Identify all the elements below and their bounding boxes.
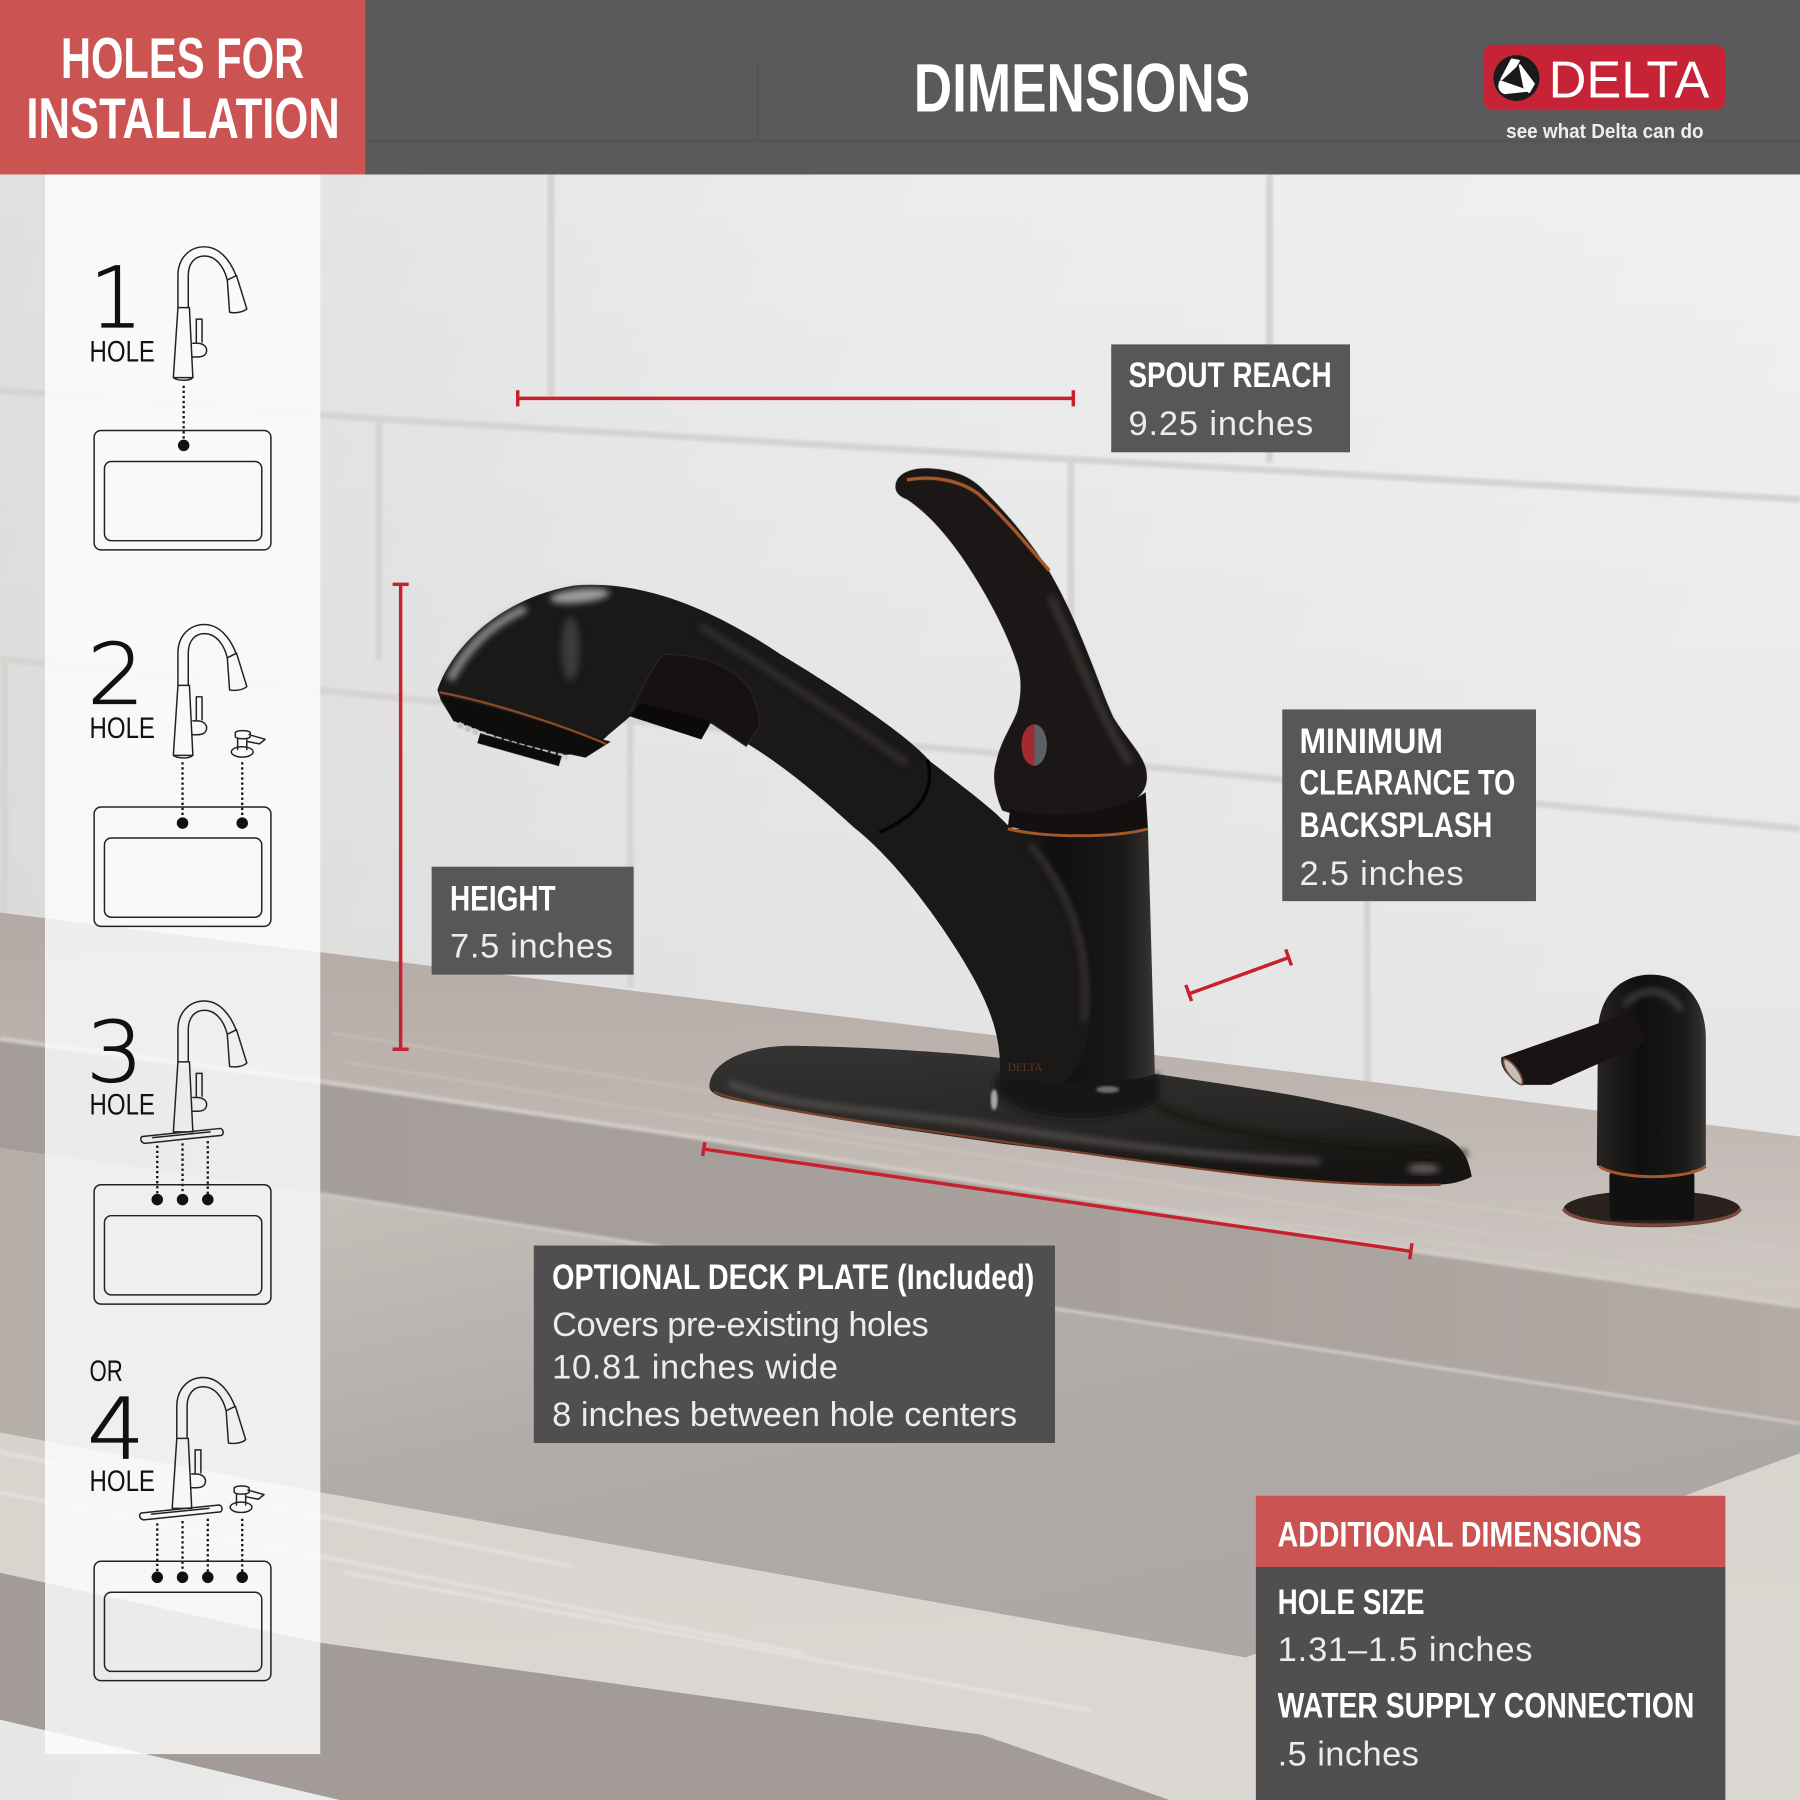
icon: soap dispenser [231,731,265,757]
option: 3 hole [86,1001,271,1304]
callout: height: 7.5 inches [450,927,613,965]
red heading: holes for installation [0,0,365,174]
option: or 4 hole: 4 [87,1380,145,1478]
icon: Delta mark [1493,55,1539,101]
panel: holes list [45,174,320,1754]
callout: spout reach: 9.25 inches [1128,405,1313,443]
height dimension line [393,584,409,1049]
callout: minimum clearance: CLEARANCE TO [1299,762,1515,802]
panel: additional dimensions [1256,1496,1725,1800]
callout: minimum clearance [1282,709,1536,901]
option: 3 hole: HOLE [90,1089,155,1122]
callout: optional deck plate: 8 inches between hole centers [552,1396,1017,1434]
icon: sink [94,1185,271,1304]
panel: additional dimensions: .5 inches [1278,1736,1419,1774]
icon: faucet [173,247,247,380]
callout: height [432,867,634,975]
callout: minimum clearance: BACKSPLASH [1299,805,1492,845]
option: 1 hole [90,247,271,550]
pull-out spout [437,585,1091,1085]
callout: optional deck plate: 10.81 inches wide [552,1349,838,1387]
faucet body [987,829,1155,1083]
option: 1 hole: HOLE [90,336,155,369]
icon: sink [94,1561,271,1681]
logo: Delta: DELTA [1549,51,1710,109]
icon: faucet with deck plate [141,1001,247,1143]
spout highlights [450,586,1085,1022]
option: 2 hole [87,624,271,926]
spray head details [440,654,929,832]
panel: additional dimensions: WATER SUPPLY CONNECTION [1278,1685,1694,1725]
handle [895,468,1148,836]
option: 1 hole: 1 [90,249,143,347]
clearance dimension line [1186,949,1291,1001]
icon: sink [94,807,271,926]
icon: sink [94,430,271,550]
header bar [365,0,1800,174]
faucet base logo: DELTA [1008,1062,1043,1074]
heading: additional dimensions [1256,1496,1725,1567]
spout reach dimension line [518,390,1073,406]
red heading: holes for installation: INSTALLATION [26,87,340,151]
option: 2 hole: 2 [87,626,145,724]
callout: optional deck plate: Covers pre-existing holes [552,1306,929,1344]
callout: minimum clearance: 2.5 inches [1299,855,1464,893]
callout: spout reach [1111,344,1350,452]
callout: minimum clearance: MINIMUM [1299,721,1443,761]
callout: optional deck plate: OPTIONAL DECK PLATE (Included) [552,1257,1034,1297]
callout: optional deck plate [534,1246,1055,1443]
title: DIMENSIONS [914,49,1250,126]
logo: Delta: see what Delta can do [1506,120,1704,143]
option: or 4 hole [87,1355,271,1681]
icon: faucet with deck plate [140,1378,246,1520]
option: or 4 hole: HOLE [90,1465,155,1498]
icon: faucet [173,624,247,758]
panel: additional dimensions: HOLE SIZE [1278,1582,1425,1622]
callout: height: HEIGHT [450,878,556,918]
logo: Delta [1483,45,1725,143]
heading: additional dimensions: ADDITIONAL DIMENSIONS [1278,1514,1642,1554]
option: 2 hole: HOLE [90,712,155,745]
callout: spout reach: SPOUT REACH [1128,355,1332,395]
icon: soap dispenser [230,1486,264,1512]
panel: additional dimensions: 1.31–1.5 inches [1278,1631,1533,1669]
red heading: holes for installation: HOLES FOR [61,27,304,91]
option: or 4 hole: OR [90,1355,123,1388]
soap dispenser [1501,975,1740,1227]
faucet photo [437,468,1472,1185]
deck plate [709,1046,1472,1185]
deck plate dimension line [703,1142,1412,1259]
option: 3 hole: 3 [86,1003,143,1101]
